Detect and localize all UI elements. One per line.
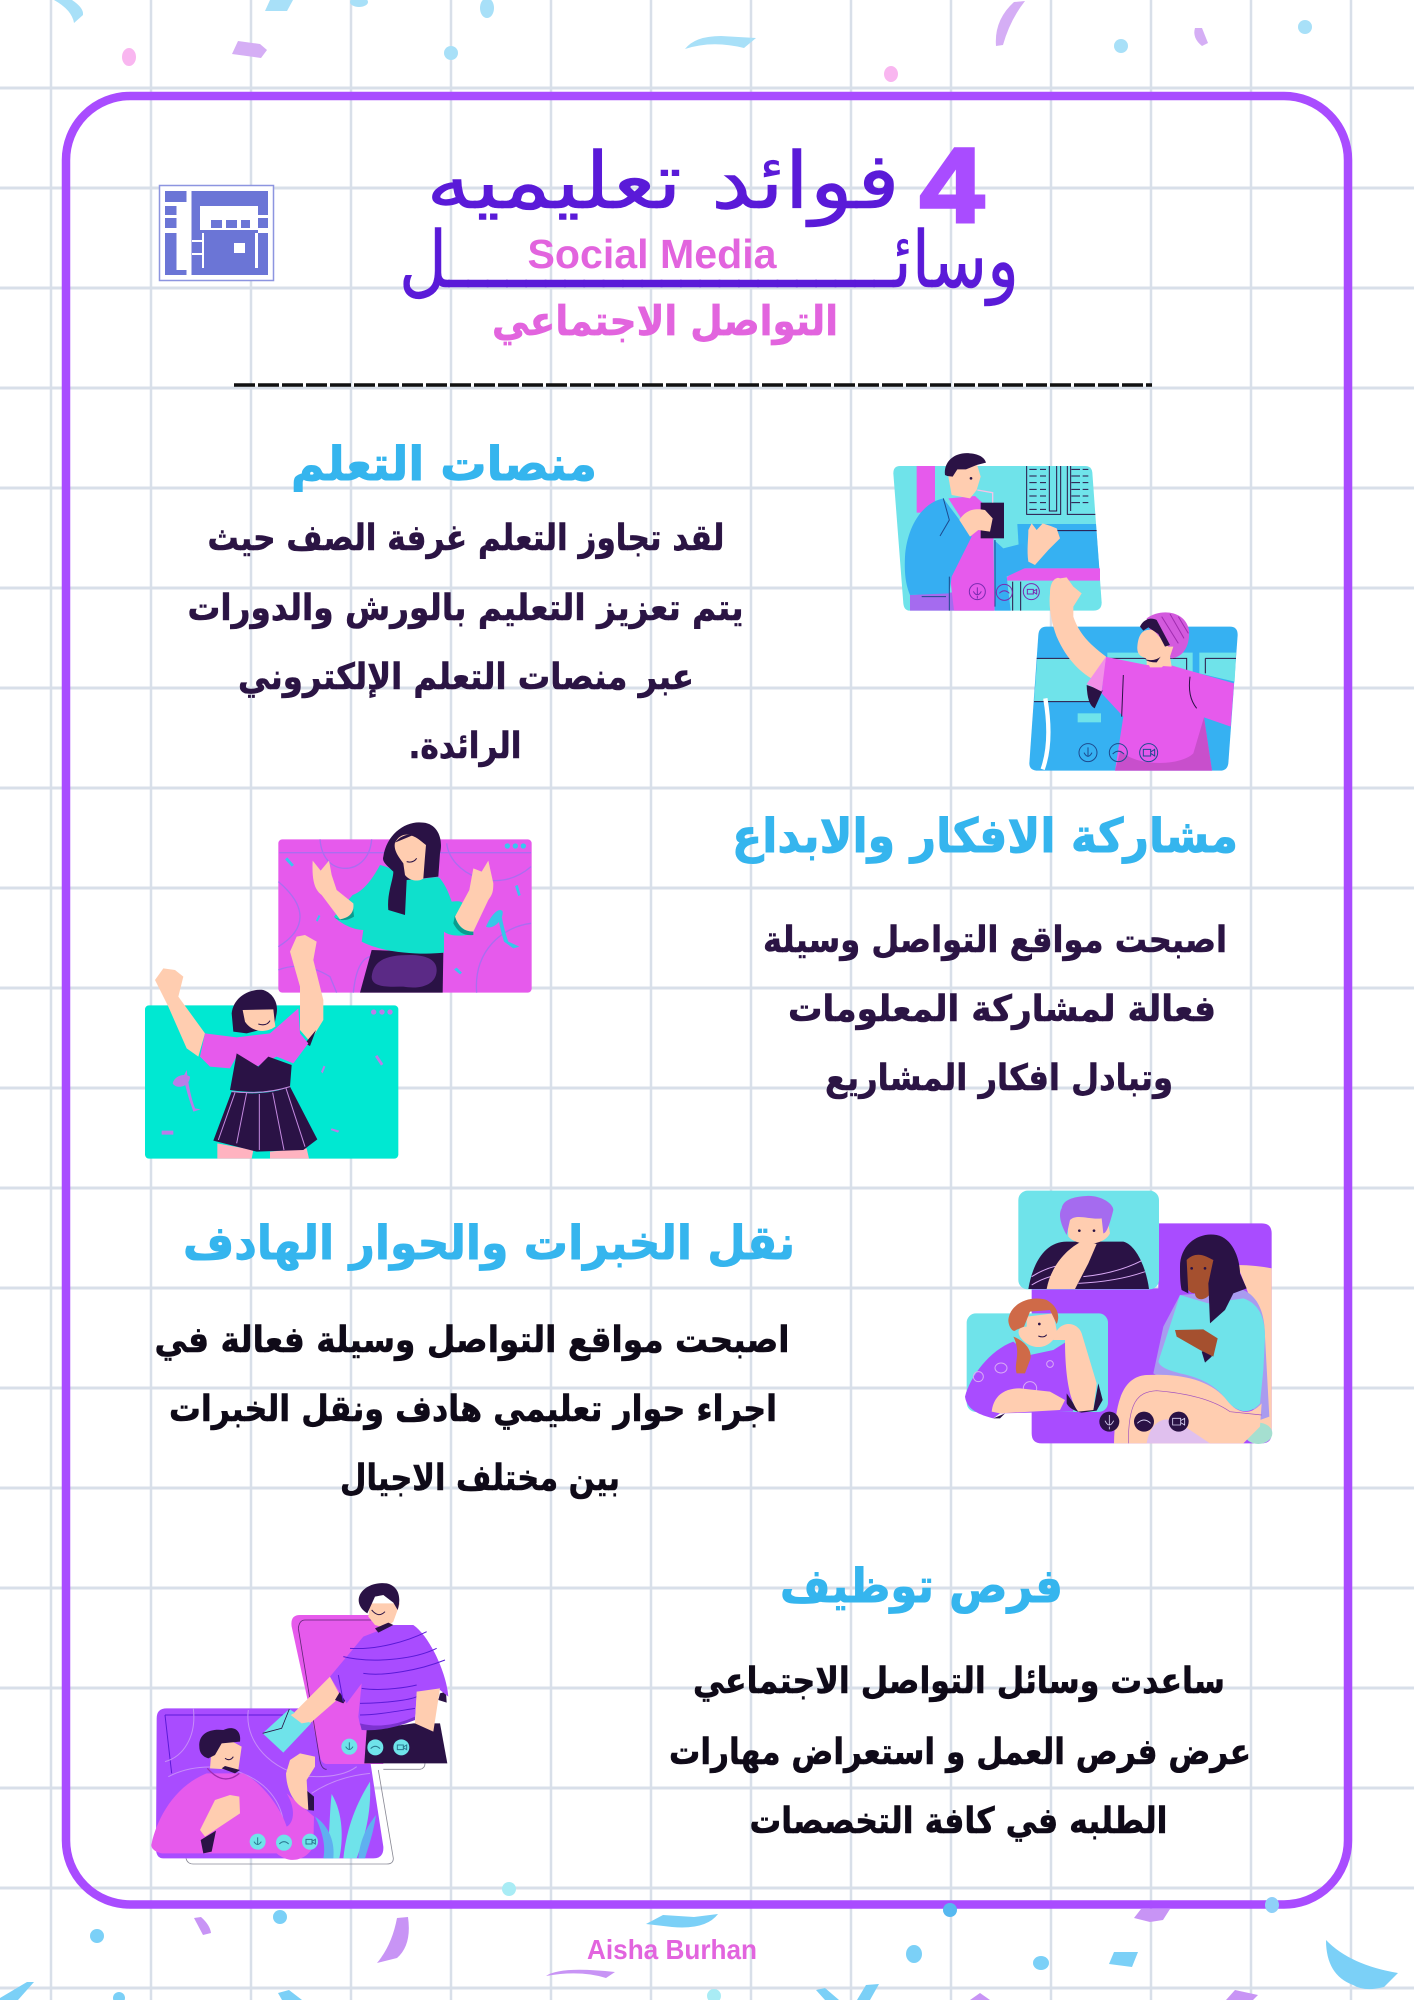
title: line two with long kashida: وسائـــــــــــــــــــــــل: [399, 216, 1019, 307]
title: line one: فوائد تعليميه: [426, 137, 900, 228]
section 1: body text: [188, 518, 744, 767]
window: man in magenta sweater: [156, 1708, 383, 1858]
call controls: [1099, 1412, 1189, 1432]
section 2: body text: وتبادل افكار المشاريع: [825, 1058, 1173, 1099]
section 3: heading: نقل الخبرات والحوار الهادف: [183, 1216, 795, 1271]
tile: red-haired woman: [965, 1299, 1108, 1418]
section 3: body text: اجراء حوار تعليمي هادف ونقل الخبرات: [169, 1389, 777, 1430]
section 2: body text: [763, 920, 1227, 1099]
section 4: body text: [669, 1661, 1251, 1842]
window: woman in black dress: [145, 935, 398, 1159]
icon: envelope: [263, 1708, 312, 1753]
section 3: body text: بين مختلف الاجيال: [340, 1458, 620, 1499]
confetti: bottom edge: [0, 1882, 1398, 2000]
window: man in striped sweater: [291, 1583, 448, 1769]
window: man drinking: [893, 453, 1102, 611]
section 1: body text: عبر منصات التعلم الإلكتروني: [238, 657, 694, 698]
person: man in magenta sweater: [151, 1728, 315, 1860]
person: woman with dark hair: [1114, 1234, 1272, 1444]
section 3: body text: [154, 1320, 790, 1499]
logo: kufi square: [160, 186, 274, 280]
subtitle: Social Media: Social Media: [528, 231, 778, 277]
divider: dashed line: [234, 383, 1152, 387]
window: boy in beanie waving: [1029, 577, 1238, 771]
section 4: heading: فرص توظيف: [780, 1559, 1063, 1614]
section 2: body text: اصبحت مواقع التواصل وسيلة: [763, 920, 1227, 961]
section 1: body text: الرائدة.: [408, 726, 522, 767]
section 1: body text: يتم تعزيز التعليم بالورش والدورات: [188, 588, 744, 629]
subtitle: Arabic: التواصل الاجتماعي: [492, 297, 838, 345]
section 2: heading: مشاركة الافكار والابداع: [732, 809, 1238, 864]
plant: [315, 1782, 376, 1858]
call controls: [250, 1739, 409, 1851]
section 3: body text: اصبحت مواقع التواصل وسيلة فعالة في: [154, 1320, 790, 1361]
title: number 4: 4: [920, 127, 984, 245]
tile: man with purple hair: [1018, 1191, 1159, 1289]
section 1: heading: منصات التعلم: [291, 437, 597, 492]
section 4: body text: ساعدت وسائل التواصل الاجتماعي: [693, 1661, 1225, 1702]
section 2: dancing women illustration: [145, 822, 532, 1159]
section 1: body text: لقد تجاوز التعلم غرفة الصف حيث: [208, 518, 724, 559]
section 4: handing envelope illustration: [151, 1583, 448, 1864]
section 1: video call illustration: [893, 453, 1238, 771]
window: woman in teal sweater: [278, 822, 532, 993]
section 3: group video chat illustration: [965, 1191, 1272, 1444]
section 4: body text: عرض فرص العمل و استعراض مهارات: [669, 1732, 1251, 1773]
section 2: body text: فعالة لمشاركة المعلومات: [788, 989, 1216, 1030]
section 4: body text: الطلبه في كافة التخصصات: [750, 1801, 1168, 1842]
confetti: top edge: [54, 0, 1312, 82]
footer: author name: Aisha Burhan: [587, 1934, 757, 1965]
